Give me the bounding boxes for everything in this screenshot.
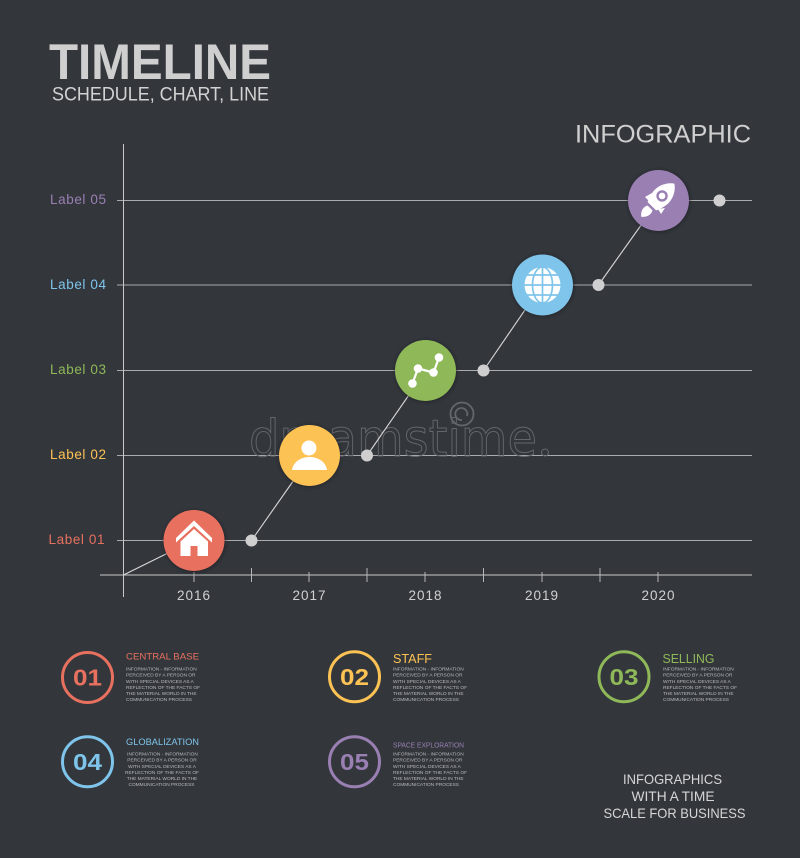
closing caption: WITH A TIME: [632, 788, 714, 804]
axis year labels: 2016: [177, 588, 211, 603]
legend item 04: globalization: REFLECTION OF THE FACTS OF: [125, 770, 199, 776]
legend item 01: central base: CENTRAL BASE: [126, 652, 199, 662]
legend item 01: central base: INFORMATION - INFORMATION: [126, 667, 197, 673]
legend item 05: space exploration: WITH SPECIAL DEVICES AS A: [393, 764, 462, 770]
legend item 03: selling: 03: [610, 664, 638, 690]
watermark: dreamstime: [249, 410, 537, 469]
legend item 01: central base: COMMUNICATION PROCESS: [126, 697, 192, 703]
axis series labels: Label 03: [50, 362, 107, 377]
legend item 01: central base: PERCEIVED BY A PERSON OR: [126, 673, 196, 679]
legend item 01: central base: REFLECTION OF THE FACTS OF: [126, 685, 200, 691]
title: TIMELINE: [49, 34, 271, 90]
legend item 03: selling: SELLING: [662, 651, 714, 666]
legend item 04: globalization: PERCEIVED BY A PERSON OR: [127, 758, 197, 764]
axis series labels: [48, 192, 107, 547]
legend item 02: staff: STAFF: [393, 651, 432, 666]
legend item 03: selling: PERCEIVED BY A PERSON OR: [663, 673, 733, 679]
legend item 02: staff: 02: [340, 664, 369, 690]
legend item 05: space exploration: COMMUNICATION PROCESS: [393, 782, 459, 788]
chart: timeline: [48, 144, 752, 603]
closing caption: SCALE FOR BUSINESS: [604, 805, 746, 821]
legend item 03: selling: [599, 651, 737, 703]
axis year labels: 2019: [525, 588, 559, 603]
legend item 02: staff: [330, 651, 467, 703]
legend item 02: staff: INFORMATION - INFORMATION: [393, 667, 464, 673]
chart grid and axes: [100, 144, 752, 597]
legend item 04: globalization: 04: [73, 749, 102, 775]
marker 05: rocket: [628, 170, 690, 232]
axis year labels: 2018: [408, 588, 443, 603]
legend item 02: staff: THE MATERIAL WORLD IN THE: [393, 691, 464, 697]
legend item 03: selling: THE MATERIAL WORLD IN THE: [663, 691, 734, 697]
legend item 05: space exploration: REFLECTION OF THE FACTS OF: [393, 770, 467, 776]
legend item 05: space exploration: THE MATERIAL WORLD IN THE: [393, 776, 464, 782]
axis series labels: Label 05: [50, 192, 107, 207]
legend item 01: central base: THE MATERIAL WORLD IN THE: [126, 691, 197, 697]
infographic heading: INFOGRAPHIC: [575, 120, 751, 148]
legend item 02: staff: PERCEIVED BY A PERSON OR: [393, 673, 463, 679]
rising trend line: [124, 221, 644, 575]
subtitle: SCHEDULE, CHART, LINE: [52, 84, 269, 106]
marker 04: globe: [512, 254, 574, 316]
marker 02: person: [278, 425, 340, 487]
legend item 05: space exploration: PERCEIVED BY A PERSON OR: [393, 758, 463, 764]
legend item 03: selling: INFORMATION - INFORMATION: [663, 667, 734, 673]
legend item 05: space exploration: INFORMATION - INFORMATION: [393, 752, 464, 758]
legend item 03: selling: COMMUNICATION PROCESS: [663, 697, 729, 703]
milestone dots: [246, 194, 726, 546]
axis year labels: 2017: [292, 588, 327, 603]
axis series labels: Label 04: [50, 277, 107, 292]
legend item 03: selling: REFLECTION OF THE FACTS OF: [663, 685, 737, 691]
legend item 04: globalization: GLOBALIZATION: [126, 737, 199, 748]
legend item 01: central base: [62, 652, 200, 703]
legend item 05: space exploration: [330, 737, 467, 788]
marker 01: house: [164, 510, 226, 572]
axis series labels: Label 01: [48, 532, 105, 547]
axis year labels: [177, 588, 676, 603]
legend item 04: globalization: THE MATERIAL WORLD IN THE: [127, 776, 197, 782]
legend item 04: globalization: [62, 737, 199, 788]
legend item 01: central base: 01: [73, 664, 102, 690]
closing caption: [604, 771, 746, 821]
axis series labels: Label 02: [50, 447, 107, 462]
legend item 01: central base: WITH SPECIAL DEVICES AS A: [126, 679, 195, 685]
legend item 05: space exploration: SPACE EXPLORATION: [393, 740, 464, 750]
marker 03: line chart: [395, 340, 457, 402]
legend item 04: globalization: INFORMATION - INFORMATION: [127, 752, 198, 758]
legend item 02: staff: COMMUNICATION PROCESS: [393, 697, 459, 703]
closing caption: INFOGRAPHICS: [623, 771, 722, 787]
legend item 05: space exploration: 05: [340, 749, 369, 775]
legend item 04: globalization: WITH SPECIAL DEVICES AS A: [128, 764, 197, 770]
axis year labels: 2020: [641, 588, 676, 603]
legend item 02: staff: WITH SPECIAL DEVICES AS A: [393, 679, 462, 685]
legend item 04: globalization: COMMUNICATION PROCESS: [128, 782, 195, 788]
legend item 03: selling: WITH SPECIAL DEVICES AS A: [663, 679, 732, 685]
legend item 02: staff: REFLECTION OF THE FACTS OF: [393, 685, 467, 691]
